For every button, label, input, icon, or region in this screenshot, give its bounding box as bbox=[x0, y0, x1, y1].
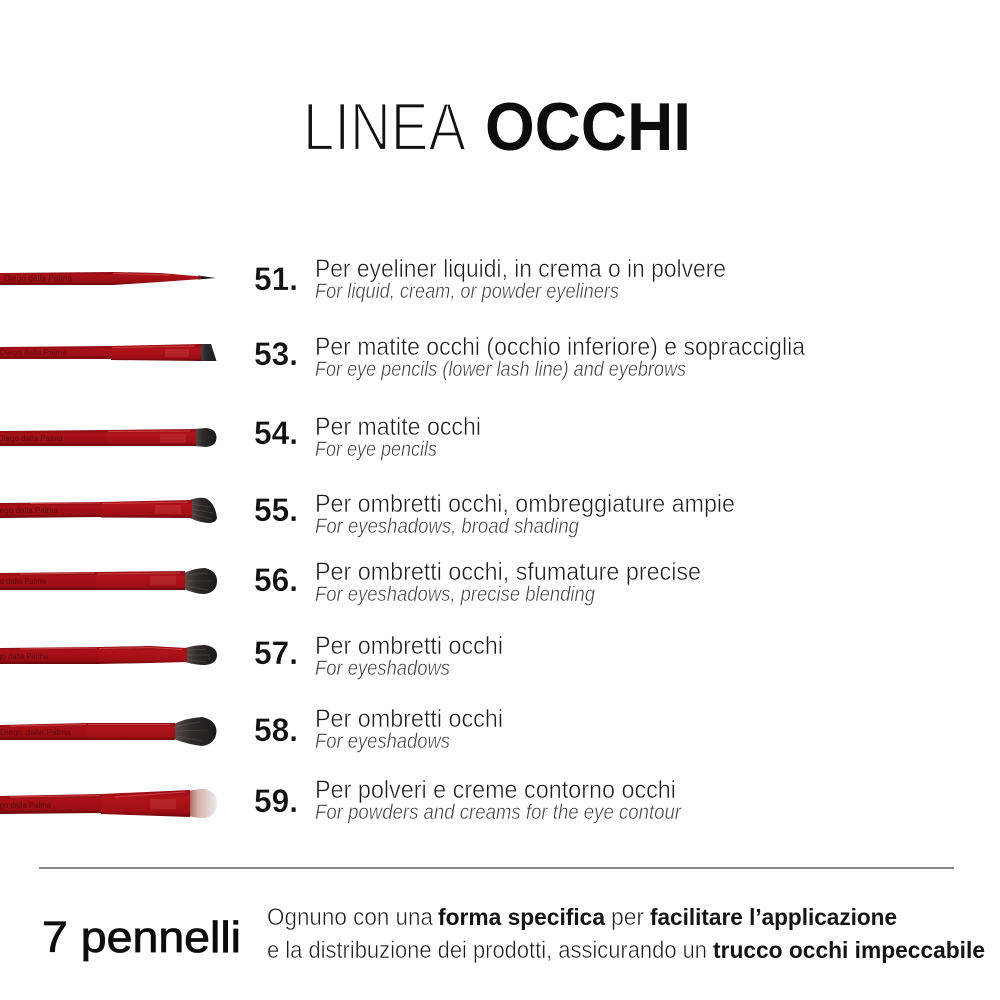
text 58 bbox=[315, 705, 503, 753]
brush 56 bbox=[0, 568, 217, 594]
row 55 bbox=[0, 490, 735, 538]
brush 53 bbox=[0, 344, 216, 361]
text 53: Per matite occhi (occhio inferiore) e sopracciglia bbox=[315, 333, 805, 361]
footer description: per bbox=[611, 904, 644, 931]
row 59 bbox=[0, 776, 682, 824]
brush 59 bbox=[0, 789, 217, 818]
text 56: For eyeshadows, precise blending bbox=[315, 583, 595, 606]
brush 54 bbox=[0, 428, 216, 447]
text 57 bbox=[315, 632, 503, 680]
text 54: Per matite occhi bbox=[315, 413, 481, 441]
brush 53: Diego dalla Palma bbox=[0, 348, 68, 357]
text 55: Per ombretti occhi, ombreggiature ampie bbox=[315, 490, 735, 518]
number 59: 59. bbox=[254, 783, 298, 819]
number 57: 57. bbox=[254, 635, 298, 671]
brush 51 bbox=[0, 272, 216, 285]
text 53 bbox=[315, 333, 805, 381]
footer description: e la distribuzione dei prodotti, assicurando un bbox=[267, 937, 707, 964]
text 57: For eyeshadows bbox=[315, 657, 450, 680]
number 58: 58. bbox=[254, 712, 298, 748]
footer description: Ognuno con una bbox=[267, 904, 434, 931]
text 54 bbox=[315, 413, 481, 461]
number 56: 56. bbox=[254, 562, 298, 598]
footer count: 7 pennelli: 7 pennelli bbox=[42, 913, 241, 962]
footer description: forma specifica bbox=[438, 904, 605, 930]
footer description bbox=[267, 904, 985, 964]
row 51 bbox=[0, 255, 726, 303]
text 55: For eyeshadows, broad shading bbox=[315, 515, 579, 538]
text 51: Per eyeliner liquidi, in crema o in polvere bbox=[315, 255, 726, 283]
title bbox=[303, 89, 691, 165]
text 58: Per ombretti occhi bbox=[315, 705, 503, 733]
footer description: trucco occhi impeccabile bbox=[713, 937, 985, 963]
number 54: 54. bbox=[254, 415, 298, 451]
row 54 bbox=[0, 413, 481, 461]
text 57: Per ombretti occhi bbox=[315, 632, 503, 660]
text 59: For powders and creams for the eye contour bbox=[315, 801, 682, 824]
text 59: Per polveri e creme contorno occhi bbox=[315, 776, 676, 804]
brush 57 bbox=[0, 645, 217, 665]
row 57 bbox=[0, 632, 503, 680]
title: OCCHI bbox=[485, 89, 691, 165]
text 55 bbox=[315, 490, 735, 538]
text 51: For liquid, cream, or powder eyeliners bbox=[315, 280, 619, 303]
brush 58 bbox=[0, 717, 216, 746]
brush 55 bbox=[0, 498, 217, 523]
text 58: For eyeshadows bbox=[315, 730, 450, 753]
row 58 bbox=[0, 705, 503, 753]
row 53 bbox=[0, 333, 805, 381]
number 55: 55. bbox=[254, 492, 298, 528]
number 53: 53. bbox=[254, 336, 298, 372]
title: LINEA bbox=[303, 89, 467, 165]
text 56 bbox=[315, 558, 701, 606]
text 56: Per ombretti occhi, sfumature precise bbox=[315, 558, 701, 586]
text 51 bbox=[315, 255, 726, 303]
text 59 bbox=[315, 776, 682, 824]
footer description: facilitare l’applicazione bbox=[650, 904, 897, 930]
brush 51: Diego dalla Palma bbox=[4, 274, 73, 283]
text 53: For eye pencils (lower lash line) and eyebrows bbox=[315, 358, 686, 381]
row 56 bbox=[0, 558, 701, 606]
text 54: For eye pencils bbox=[315, 438, 437, 461]
brush 58: Diego dalla Palma bbox=[0, 728, 72, 737]
number 51: 51. bbox=[254, 261, 298, 297]
